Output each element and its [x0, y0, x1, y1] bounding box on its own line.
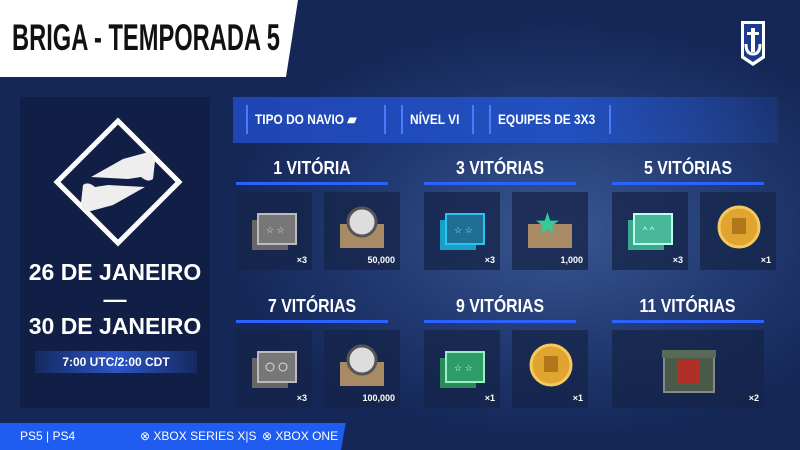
section: 3 vitorias: ★ [534, 208, 561, 241]
section: 9 vitorias: ×1 [485, 393, 495, 403]
text: ×1 [573, 393, 583, 403]
title banner: BRIGA - TEMPORADA 5 [12, 17, 280, 58]
time badge: 7:00 UTC/2:00 CDT [62, 355, 170, 369]
section: 5 vitorias: 5 VITÓRIAS [644, 158, 732, 178]
section: 1 vitoria: 1 VITÓRIA [273, 158, 351, 178]
platforms bar: ⊗ XBOX SERIES X|S [140, 429, 257, 443]
platforms bar [0, 423, 360, 450]
text: dates: 30 DE JANEIRO [29, 313, 201, 339]
section: 7 vitorias: 100,000 [362, 393, 395, 403]
section: 5 vitorias: ^ ^ [643, 225, 655, 235]
section: 11 vitorias: 11 VITÓRIAS [640, 296, 736, 316]
section: 5 vitorias: ×3 [673, 255, 683, 265]
time badge [35, 351, 197, 373]
section: 1 vitoria: ☆ ☆ [266, 225, 285, 235]
panel: event info [20, 97, 210, 408]
filter bar: TIPO DO NAVIO ▰ [255, 111, 356, 127]
icon: gauntlets diamond [54, 118, 182, 246]
section: 1 vitoria: 50,000 [367, 255, 395, 265]
section: 3 vitorias: ☆ ☆ [454, 225, 473, 235]
text: dates: 26 DE JANEIRO [29, 259, 201, 285]
section: 11 vitorias [612, 295, 764, 408]
section: 7 vitorias: ×3 [297, 393, 307, 403]
section: 9 vitorias [424, 295, 588, 408]
section: 9 vitorias: 9 VITÓRIAS [456, 296, 544, 316]
title banner [0, 0, 298, 77]
platforms bar: PS5 | PS4 [20, 429, 75, 443]
icon: logo shield [741, 21, 765, 66]
section: 3 vitorias: ×3 [485, 255, 495, 265]
section: 3 vitorias [424, 157, 588, 270]
filter bar: EQUIPES DE 3X3 [498, 111, 595, 127]
text: dates [29, 259, 201, 339]
text: dates: — [104, 286, 126, 312]
section: 3 vitorias: 3 VITÓRIAS [456, 158, 544, 178]
section: 1 vitoria [236, 157, 400, 270]
text: ×1 [761, 255, 771, 265]
section: 1 vitoria: ×3 [297, 255, 307, 265]
filter bar: NÍVEL VI [410, 111, 459, 127]
platforms bar: ⊗ XBOX ONE [262, 429, 338, 443]
section: 9 vitorias: ☆ ☆ [454, 363, 473, 373]
section: 5 vitorias [612, 157, 776, 270]
section: 11 vitorias: ×2 [749, 393, 759, 403]
section: 7 vitorias: 7 VITÓRIAS [268, 296, 356, 316]
section: 3 vitorias: 1,000 [560, 255, 583, 265]
filter bar [233, 97, 778, 143]
section: 7 vitorias [236, 295, 400, 408]
